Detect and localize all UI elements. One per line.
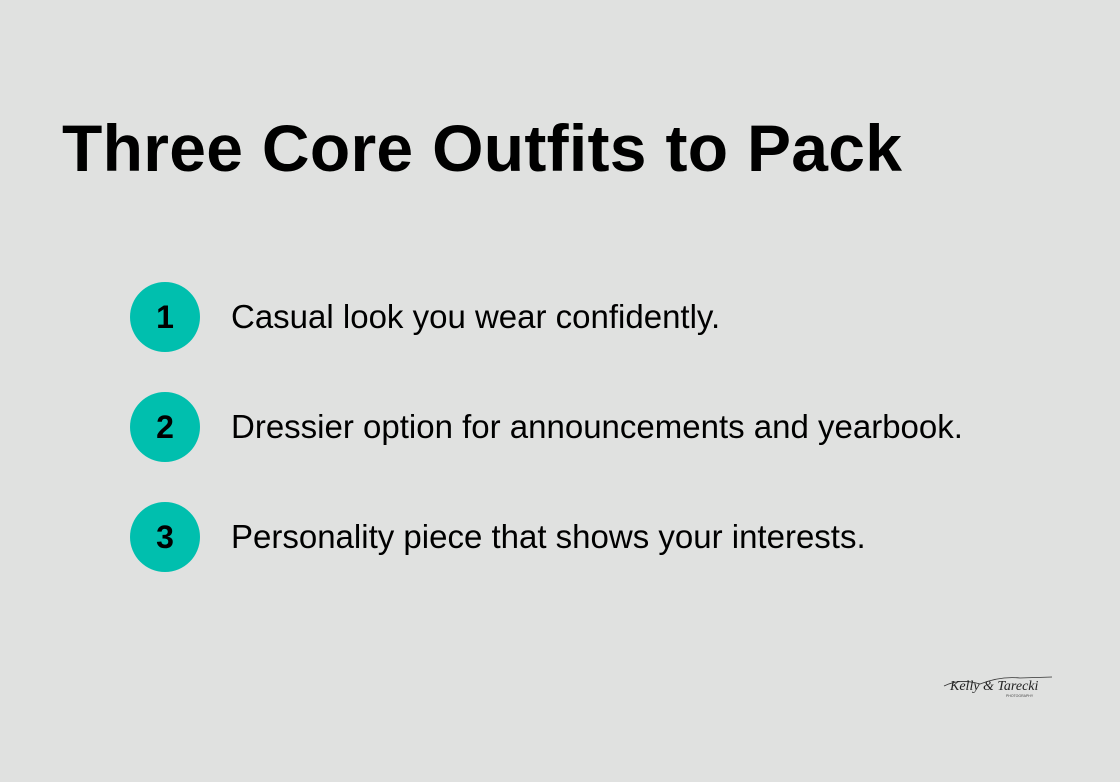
badge 3: 3 bbox=[156, 519, 174, 555]
text 1: Casual look you wear confidently. bbox=[231, 298, 720, 335]
signature logo bbox=[944, 676, 1052, 698]
list item 3 bbox=[130, 502, 866, 572]
text 3: Personality piece that shows your interests. bbox=[231, 518, 866, 555]
badge 1 bbox=[130, 282, 200, 352]
badge 1: 1 bbox=[156, 299, 174, 335]
list item 1 bbox=[130, 282, 720, 352]
signature logo: PHOTOGRAPHY bbox=[1006, 694, 1034, 698]
list item 2 bbox=[130, 392, 963, 462]
signature logo: Kelly & Tarecki bbox=[949, 679, 1039, 694]
title: Three Core Outfits to Pack bbox=[62, 111, 902, 185]
text 2: Dressier option for announcements and yearbook. bbox=[231, 408, 963, 445]
badge 3 bbox=[130, 502, 200, 572]
badge 2 bbox=[130, 392, 200, 462]
badge 2: 2 bbox=[156, 409, 174, 445]
